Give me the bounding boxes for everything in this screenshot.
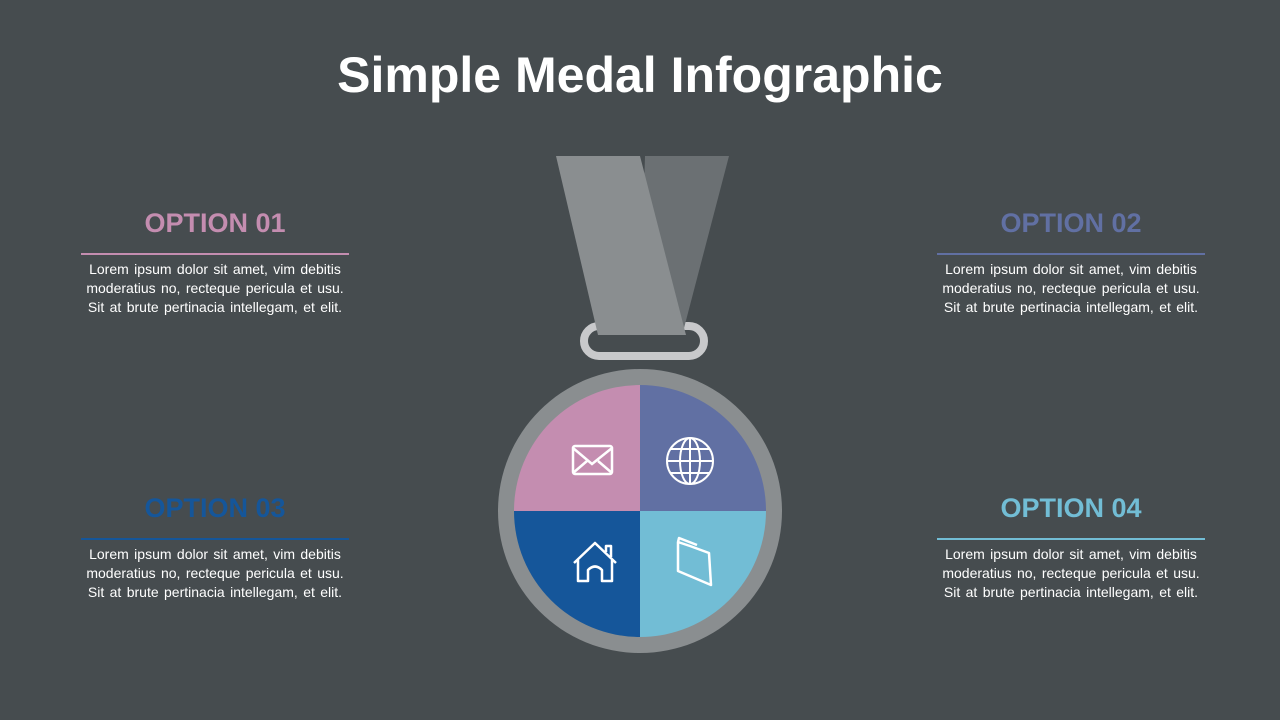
icon: folder [678, 538, 711, 585]
medal disc [498, 369, 782, 653]
option 04: Lorem ipsum dolor sit amet, vim debitis [945, 546, 1197, 562]
option 01: OPTION 01 [144, 208, 286, 238]
option 02 [937, 208, 1205, 315]
option 02: moderatius no, recteque pericula et usu. [942, 280, 1200, 296]
option 01: moderatius no, recteque pericula et usu. [86, 280, 344, 296]
option 03: Lorem ipsum dolor sit amet, vim debitis [89, 546, 341, 562]
option 01: Sit at brute pertinacia intellegam, et elit. [88, 299, 342, 315]
title: Simple Medal Infographic [337, 47, 943, 103]
ring [584, 326, 704, 356]
option 01: Lorem ipsum dolor sit amet, vim debitis [89, 261, 341, 277]
option 04: Sit at brute pertinacia intellegam, et elit. [944, 584, 1198, 600]
option 04: moderatius no, recteque pericula et usu. [942, 565, 1200, 581]
option 03: Sit at brute pertinacia intellegam, et elit. [88, 584, 342, 600]
icon: globe [667, 438, 713, 484]
option 04 [937, 493, 1205, 600]
option 01 [81, 208, 349, 315]
option 04: OPTION 04 [1000, 493, 1142, 523]
option 02: OPTION 02 [1000, 208, 1142, 238]
option 03 [81, 493, 349, 600]
icon: envelope [573, 446, 612, 474]
icon: house [574, 543, 616, 581]
option 02: Lorem ipsum dolor sit amet, vim debitis [945, 261, 1197, 277]
option 03: moderatius no, recteque pericula et usu. [86, 565, 344, 581]
ribbon [556, 156, 729, 335]
option 03: OPTION 03 [144, 493, 286, 523]
option 02: Sit at brute pertinacia intellegam, et elit. [944, 299, 1198, 315]
